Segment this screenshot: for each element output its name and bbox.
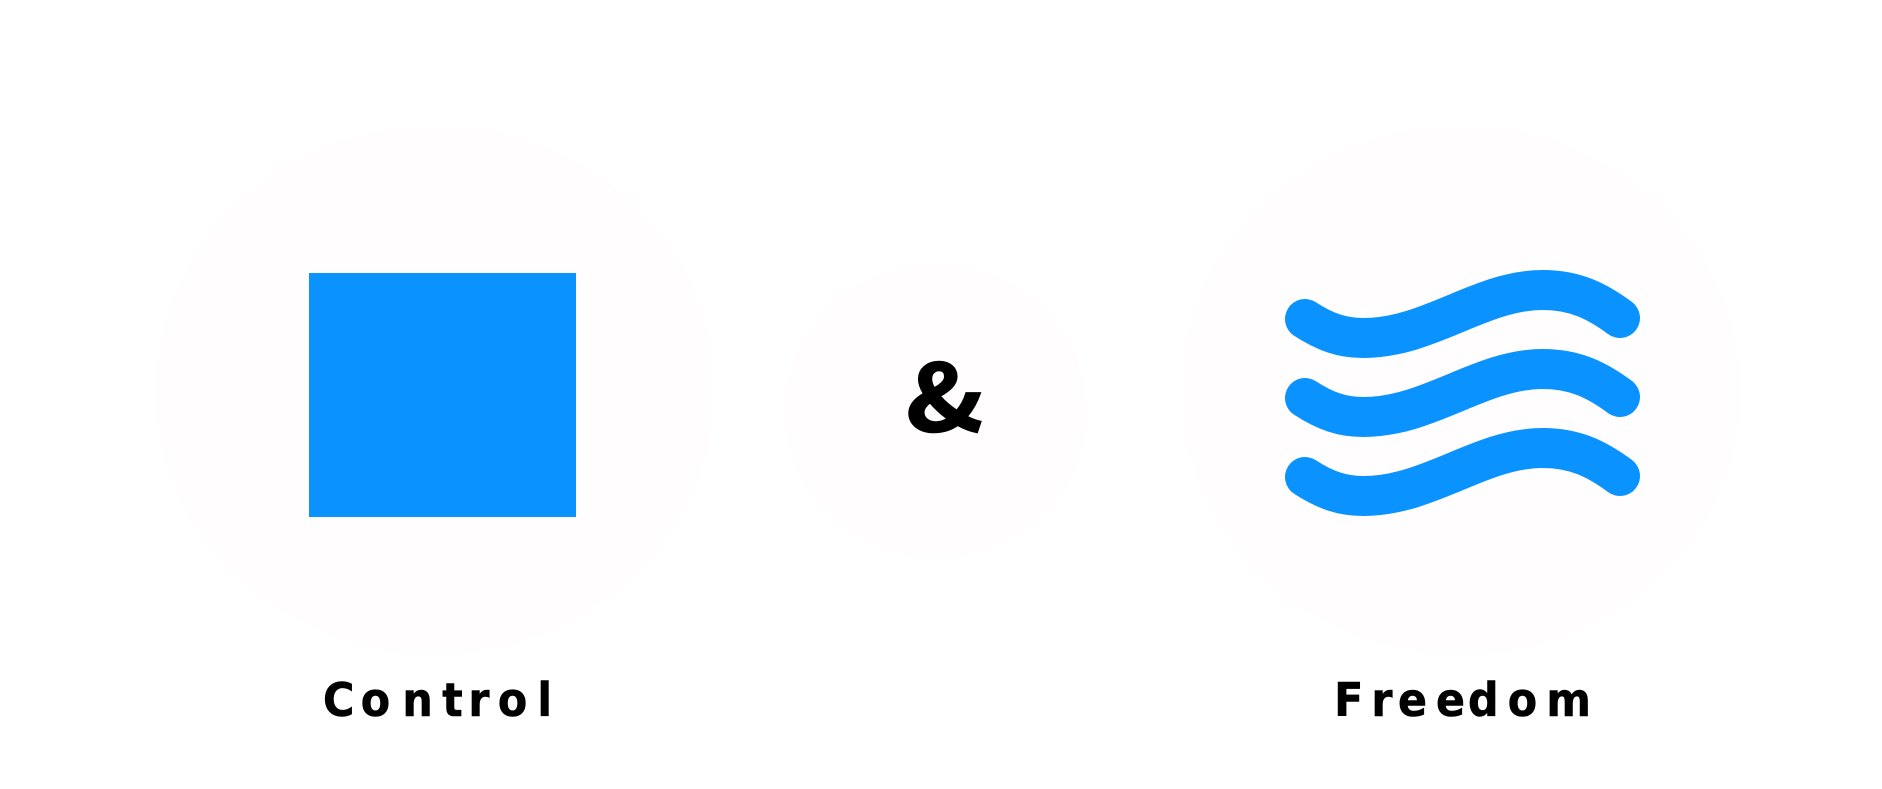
ampersand background circle <box>786 264 1086 558</box>
label: Control: Control <box>323 675 552 727</box>
panel: freedom <box>1182 126 1740 727</box>
icon: three waves <box>1305 290 1620 496</box>
icon: blue square <box>309 273 576 517</box>
panel: ampersand <box>786 264 1086 558</box>
freedom background circle <box>1182 126 1740 654</box>
control background circle <box>156 126 714 654</box>
label: Freedom: Freedom <box>1334 675 1591 727</box>
ampersand glyph: & <box>906 325 983 458</box>
panel: control <box>156 126 714 727</box>
